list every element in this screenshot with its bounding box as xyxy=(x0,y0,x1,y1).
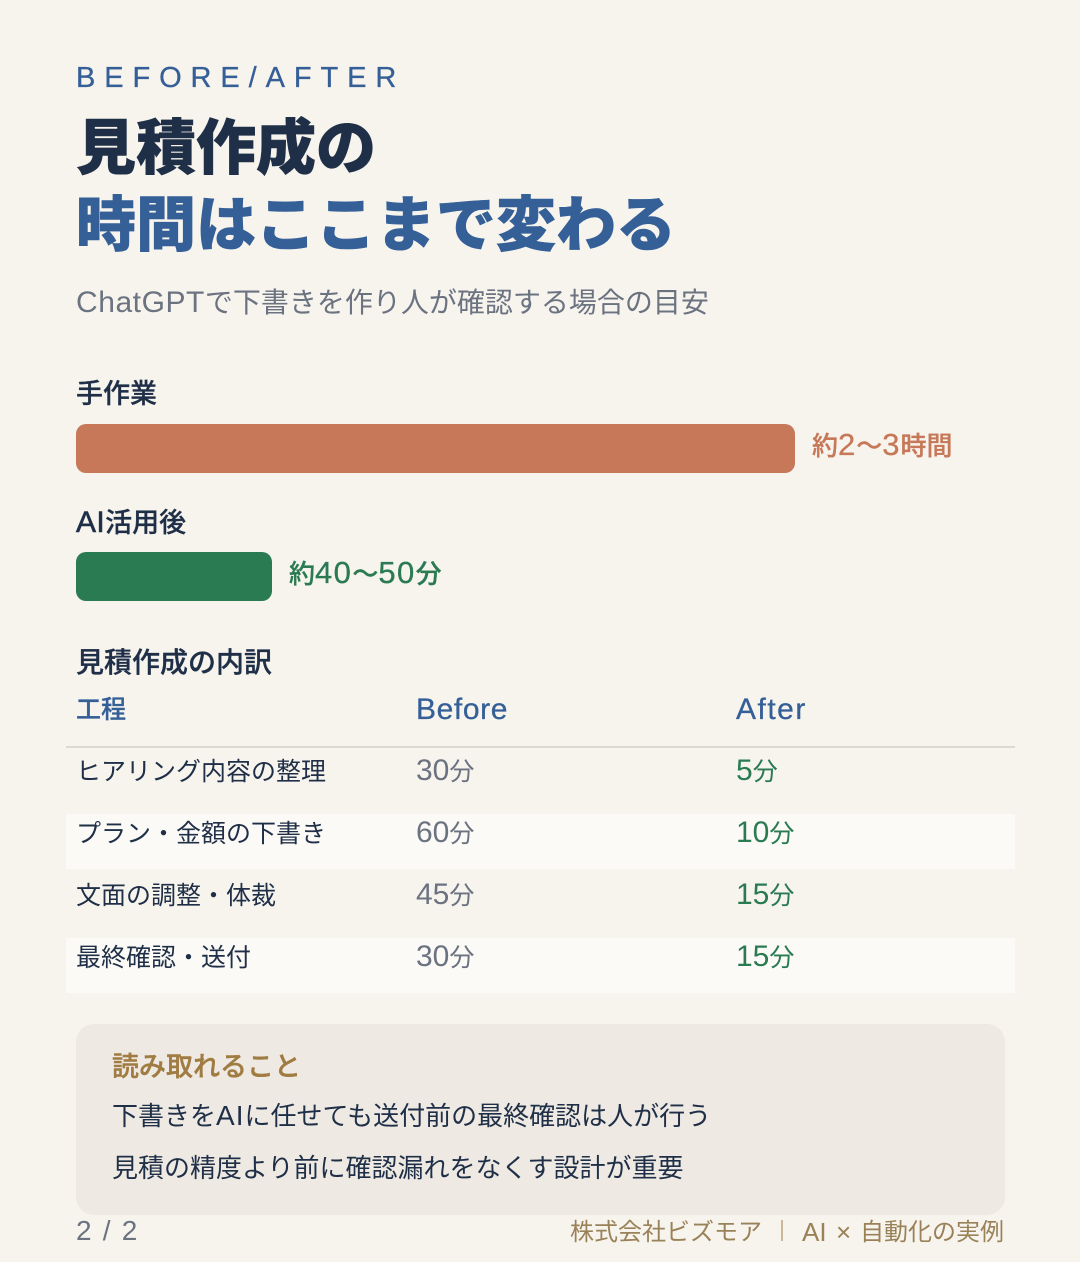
callout line 1: 下書きをAIに任せても送付前の最終確認は人が行う xyxy=(112,1100,711,1131)
row 4 xyxy=(66,938,1015,993)
table: breakdown xyxy=(66,693,1015,973)
footer credit: AI xyxy=(802,1217,827,1247)
row 2: プラン・金額の下書き xyxy=(76,820,326,848)
row 4: 最終確認・送付 xyxy=(76,944,251,972)
table header: 工程 xyxy=(76,696,126,724)
eyebrow label: BEFORE/AFTER xyxy=(76,62,405,94)
callout: takeaways xyxy=(76,1024,1005,1215)
table heading: 見積作成の内訳 xyxy=(76,647,272,678)
row 3: 15分 xyxy=(736,878,794,911)
row 4: 15分 xyxy=(736,940,794,973)
row 3 xyxy=(76,878,794,911)
table header: After xyxy=(736,693,807,726)
row 1: ヒアリング内容の整理 xyxy=(76,758,326,786)
bar: after AI xyxy=(76,552,272,601)
table header: Before xyxy=(416,693,508,726)
row 2 xyxy=(66,814,1015,869)
subtitle: ChatGPTで下書きを作り人が確認する場合の目安 xyxy=(76,286,709,319)
row 2: 60分 xyxy=(416,816,474,849)
footer credit: 株式会社ビズモア xyxy=(570,1219,762,1246)
row 4: 30分 xyxy=(416,940,474,973)
footer credit: 自動化の実例 xyxy=(860,1219,1004,1246)
callout line 2: 見積の精度より前に確認漏れをなくす設計が重要 xyxy=(112,1153,683,1183)
title: 見積作成の xyxy=(76,115,376,182)
row 3: 45分 xyxy=(416,878,474,911)
row 2: 10分 xyxy=(736,816,794,849)
label: after AI: AI活用後 xyxy=(76,506,186,539)
page number: 2 / 2 xyxy=(76,1215,139,1246)
footer credit: × xyxy=(836,1217,851,1247)
value: after AI: 約40〜50分 xyxy=(289,555,442,590)
value: manual: 約2〜3時間 xyxy=(812,427,953,462)
bar: manual xyxy=(76,424,795,473)
title: 時間はここまで変わる xyxy=(76,192,676,259)
label: manual: 手作業 xyxy=(76,379,157,409)
row 1: 30分 xyxy=(416,754,474,787)
title xyxy=(76,115,676,259)
row 1: 5分 xyxy=(736,754,778,787)
footer credit xyxy=(570,1217,1004,1247)
callout heading: 読み取れること xyxy=(112,1052,301,1082)
table header xyxy=(66,690,1015,748)
row 3: 文面の調整・体裁 xyxy=(76,882,276,910)
row 1 xyxy=(76,754,778,787)
